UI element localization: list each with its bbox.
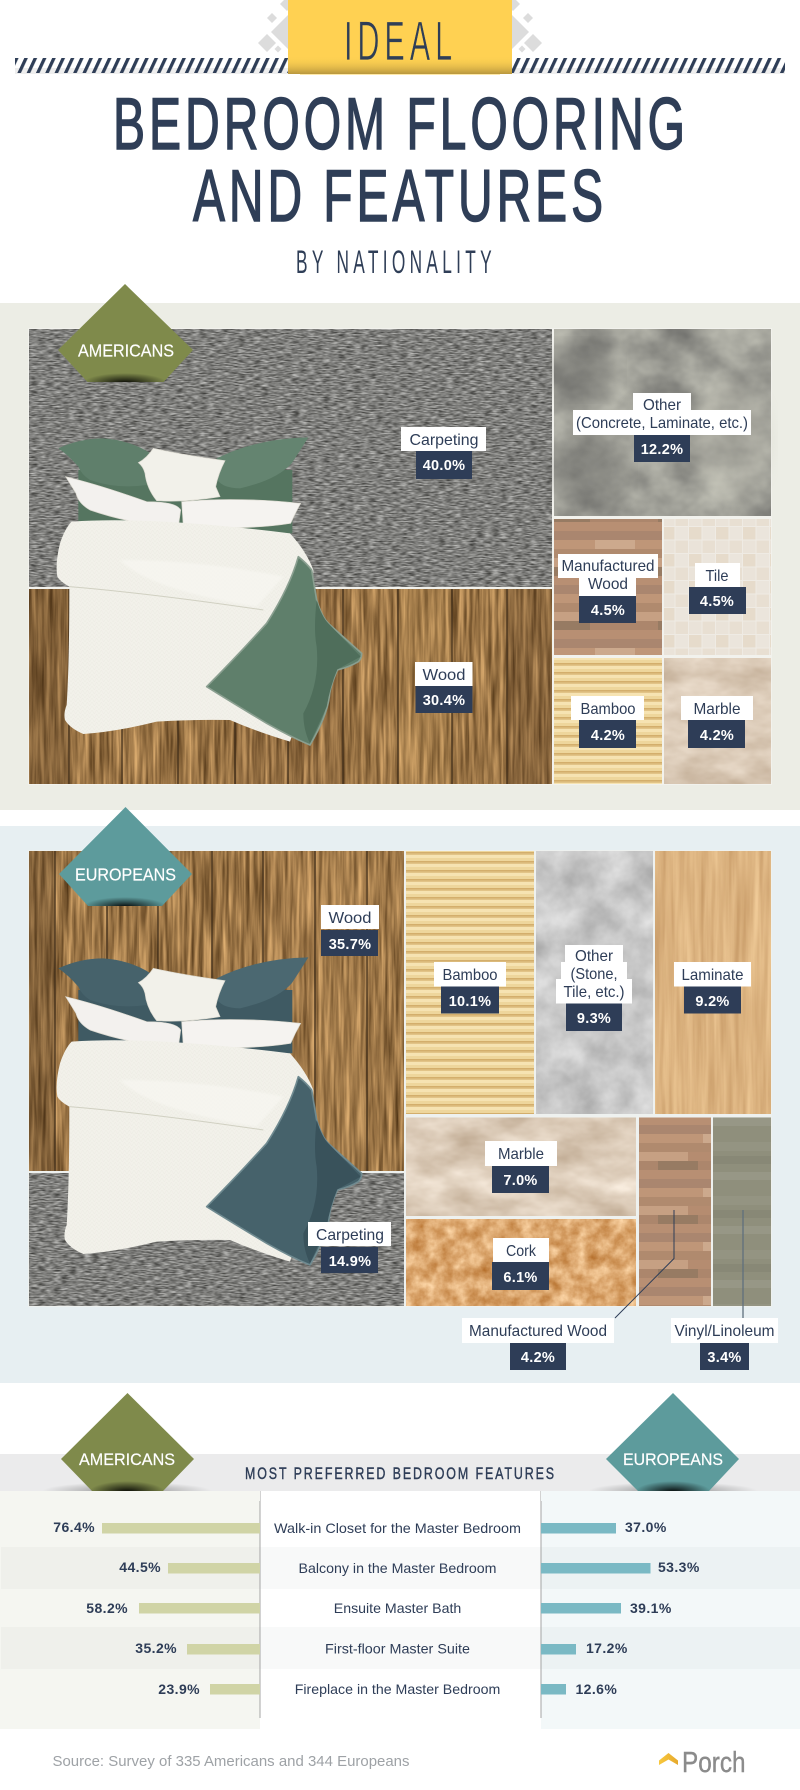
- floor: marble: [664, 658, 771, 784]
- row: first-floor: [135, 1640, 628, 1656]
- label: manufactured wood 4.5%: Manufactured: [562, 558, 654, 575]
- decorative diamonds: [258, 0, 542, 52]
- logo: Porch: Porch: [682, 1747, 746, 1779]
- label: wood 35.7%: Wood: [328, 910, 372, 927]
- panel: most preferred bedroom features: [0, 1393, 800, 1729]
- label: other 9.3%: Tile, etc.): [564, 984, 624, 1001]
- floor: manufactured wood: [639, 1118, 711, 1306]
- label: cork 6.1%: Cork: [506, 1243, 537, 1260]
- row: ensuite: 58.2%: [86, 1600, 128, 1616]
- label: laminate 9.2%: [674, 962, 751, 1014]
- label: marble 4.2%: [681, 696, 753, 748]
- floor: laminate: [655, 851, 771, 1114]
- label: manufactured wood 4.2%: 4.2%: [521, 1350, 555, 1366]
- row: walk-in closet: 37.0%: [625, 1519, 667, 1535]
- leader line: manufactured wood: [615, 1210, 674, 1318]
- floor: cork: [406, 1219, 636, 1306]
- label: bamboo 4.2%: [571, 696, 644, 748]
- floor: carpeting: [29, 1173, 404, 1306]
- label: manufactured wood 4.5%: [558, 554, 658, 623]
- label: other 12.2%: [573, 393, 751, 462]
- row: first-floor: 35.2%: [135, 1640, 177, 1656]
- label: other 12.2%: (Concrete, Laminate, etc.): [576, 415, 748, 432]
- label: vinyl 3.4%: 3.4%: [707, 1350, 742, 1366]
- hatched stripe band: [15, 58, 785, 74]
- row: ensuite: Ensuite Master Bath: [334, 1600, 461, 1616]
- label: tile 4.5%: [689, 563, 746, 614]
- label: tile 4.5%: Tile: [706, 568, 729, 585]
- row: fireplace: Fireplace in the Master Bedroom: [295, 1681, 500, 1697]
- bed illustration: [57, 437, 362, 745]
- label: cork 6.1%: 6.1%: [503, 1270, 538, 1286]
- label: tile 4.5%: 4.5%: [700, 594, 734, 610]
- label: other 12.2%: 12.2%: [641, 442, 683, 458]
- floor: marble: [406, 1118, 636, 1216]
- row: balcony: Balcony in the Master Bedroom: [298, 1560, 496, 1576]
- label: bamboo 4.2%: 4.2%: [591, 728, 625, 744]
- banner text: IDEAL: IDEAL: [344, 9, 457, 72]
- row: walk-in closet: 76.4%: [53, 1519, 95, 1535]
- badge: Europeans: [606, 1393, 739, 1491]
- badge: Americans: AMERICANS: [78, 340, 174, 360]
- label: carpeting 14.9%: Carpeting: [316, 1227, 384, 1244]
- floor: carpeting: [29, 329, 552, 587]
- label: manufactured wood 4.2%: [462, 1318, 614, 1370]
- label: other 12.2%: Other: [643, 397, 682, 414]
- label: marble 7.0%: Marble: [498, 1146, 544, 1163]
- floor: wood: [29, 851, 404, 1171]
- row: first-floor: 17.2%: [586, 1640, 628, 1656]
- header: [15, 0, 785, 280]
- label: wood 30.4%: 30.4%: [423, 693, 465, 709]
- label: marble 7.0%: [485, 1141, 557, 1193]
- badge: Americans: [61, 1393, 194, 1491]
- floor: wood: [29, 589, 552, 784]
- bed illustration: [57, 957, 362, 1265]
- leader line: vinyl: [742, 1210, 744, 1318]
- row: first-floor: First-floor Master Suite: [325, 1640, 470, 1656]
- label: carpeting 14.9%: 14.9%: [329, 1254, 371, 1270]
- label: vinyl 3.4%: Vinyl/Linoleum: [674, 1323, 774, 1340]
- label: bamboo 4.2%: Bamboo: [580, 701, 636, 718]
- row: fireplace: [158, 1681, 617, 1697]
- label: manufactured wood 4.5%: 4.5%: [591, 603, 625, 619]
- label: other 9.3%: Other: [575, 948, 614, 965]
- row: balcony: 53.3%: [658, 1559, 700, 1575]
- source: Source: Survey of 335 Americans and 344 Europeans: [52, 1754, 410, 1770]
- label: laminate 9.2%: Laminate: [682, 967, 744, 984]
- floor: tile: [664, 519, 771, 655]
- label: manufactured wood 4.5%: Wood: [588, 576, 628, 593]
- label: marble 7.0%: 7.0%: [503, 1173, 538, 1189]
- floor: other: [550, 329, 771, 516]
- badge: Europeans: EUROPEANS: [623, 1450, 723, 1469]
- label: wood 30.4%: [415, 662, 472, 713]
- label: bamboo 10.1%: Bamboo: [442, 967, 498, 984]
- row: fireplace: 23.9%: [158, 1681, 200, 1697]
- label: carpeting 14.9%: [308, 1222, 391, 1273]
- badge: Europeans: EUROPEANS: [75, 864, 176, 884]
- label: other 9.3%: [556, 945, 632, 1031]
- floor: vinyl: [713, 1118, 771, 1306]
- label: wood 35.7%: [321, 905, 379, 956]
- row: ensuite: [86, 1600, 672, 1616]
- label: carpeting 40.0%: 40.0%: [423, 458, 465, 474]
- row: walk-in closet: Walk-in Closet for the Master Bedroom: [274, 1520, 521, 1536]
- floor: bamboo: [406, 851, 534, 1114]
- row: balcony: 44.5%: [119, 1559, 161, 1575]
- label: cork 6.1%: [492, 1238, 549, 1290]
- row: walk-in closet: [53, 1519, 667, 1536]
- label: manufactured wood 4.2%: Manufactured Wood: [469, 1323, 607, 1340]
- label: carpeting 40.0%: [401, 427, 486, 479]
- label: wood 35.7%: 35.7%: [329, 937, 371, 953]
- logo: Porch: [659, 1747, 746, 1779]
- label: vinyl 3.4%: [671, 1318, 778, 1370]
- yellow banner: [288, 0, 512, 75]
- floor: manufactured wood: [554, 519, 662, 655]
- label: marble 4.2%: 4.2%: [700, 728, 734, 744]
- label: marble 4.2%: Marble: [694, 701, 741, 718]
- floor: other: [536, 851, 653, 1114]
- label: carpeting 40.0%: Carpeting: [410, 432, 478, 449]
- label: laminate 9.2%: 9.2%: [695, 994, 730, 1010]
- label: other 9.3%: (Stone,: [570, 966, 618, 983]
- row: balcony: [119, 1559, 700, 1576]
- label: bamboo 10.1%: [434, 962, 506, 1014]
- panel: Europeans flooring: [0, 807, 800, 1383]
- subtitle: BY NATIONALITY: [296, 244, 496, 280]
- floor: bamboo: [554, 658, 662, 784]
- badge: Americans: AMERICANS: [79, 1450, 175, 1469]
- label: other 9.3%: 9.3%: [577, 1011, 611, 1027]
- row: fireplace: 12.6%: [576, 1681, 617, 1697]
- label: wood 30.4%: Wood: [422, 667, 466, 684]
- label: bamboo 10.1%: 10.1%: [449, 994, 491, 1010]
- panel: Americans flooring: [0, 284, 800, 810]
- badge: Europeans: [59, 807, 192, 917]
- badge: Americans: [58, 284, 193, 382]
- heading: MOST PREFERRED BEDROOM FEATURES: [245, 1465, 556, 1483]
- row: ensuite: 39.1%: [630, 1600, 672, 1616]
